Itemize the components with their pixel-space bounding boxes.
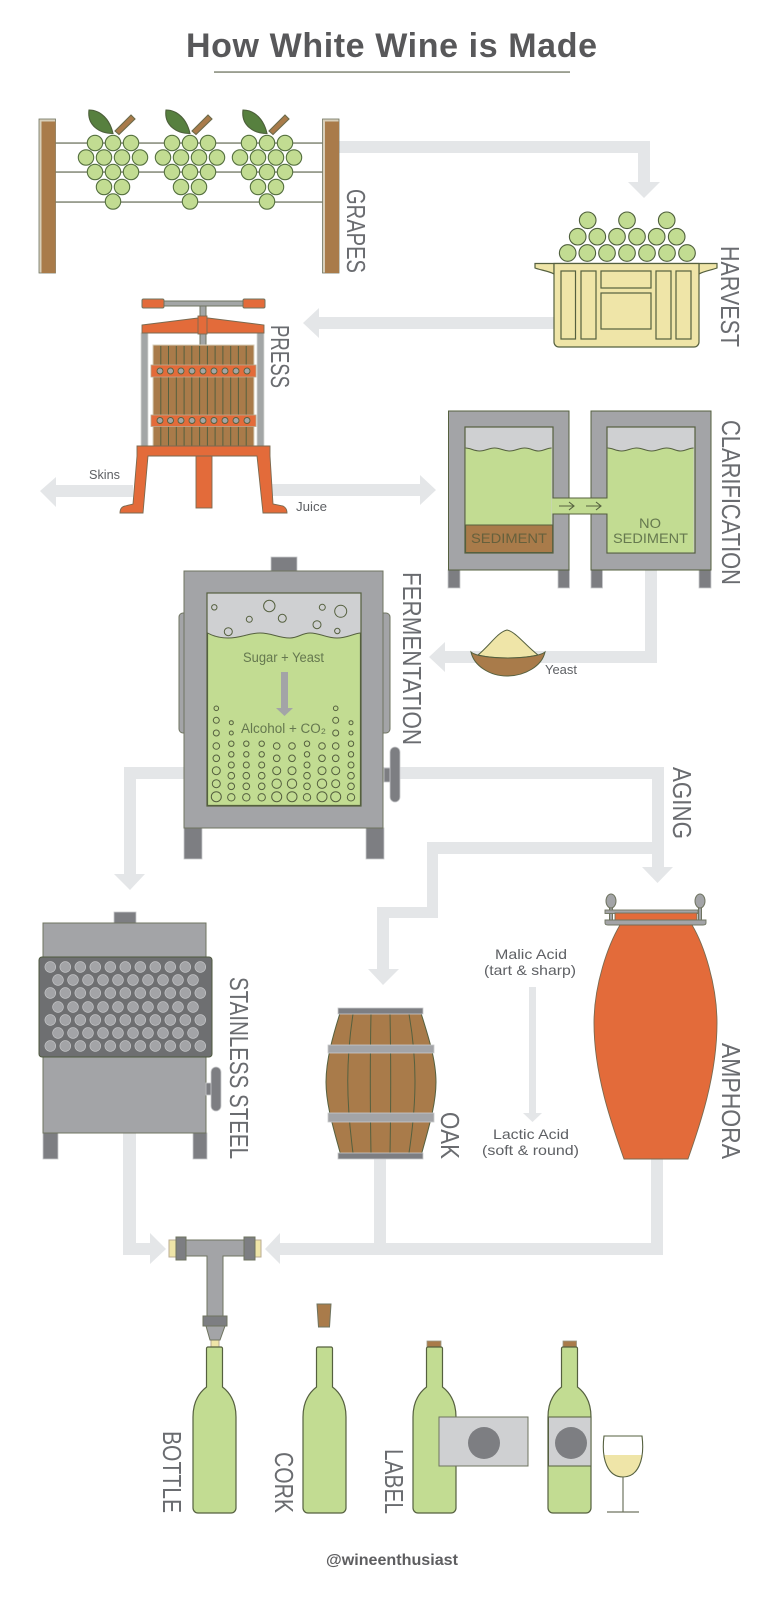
label: press: PRESS <box>265 325 293 388</box>
icon: cork <box>317 1304 331 1327</box>
label: bottle: BOTTLE <box>157 1431 185 1513</box>
panel: grapes <box>39 110 339 273</box>
lid <box>605 910 706 925</box>
foam bubbles <box>212 600 347 636</box>
nozzle <box>206 1326 225 1340</box>
panel: harvest <box>535 212 717 347</box>
post: right <box>322 119 339 273</box>
press screw and handle <box>142 299 265 346</box>
press top beam <box>142 316 264 334</box>
pipe <box>185 1240 245 1316</box>
text: lactic acid: (soft & round) <box>482 1142 579 1158</box>
label: label: LABEL <box>379 1449 407 1514</box>
arrow: fermentation reaction <box>276 672 293 716</box>
clips <box>606 894 705 920</box>
tank body <box>184 571 383 828</box>
panel: oak barrel <box>326 1008 436 1159</box>
arrow: malic to lactic acid <box>523 987 542 1122</box>
label: clarification: CLARIFICATION <box>716 420 744 585</box>
cream ends <box>169 1240 261 1347</box>
panel: fermentation <box>179 557 400 859</box>
icon: grape cluster 1 <box>78 110 148 209</box>
label: grapes: GRAPES <box>341 189 369 273</box>
label: stainless steel: STAINLESS STEEL <box>224 977 252 1159</box>
text: sediment: SEDIMENT <box>471 530 547 546</box>
label: amphora: AMPHORA <box>716 1043 744 1159</box>
wine label flying <box>439 1417 528 1466</box>
tank lid <box>271 557 297 572</box>
arrow: harvest to press <box>303 308 554 338</box>
arrow: fermentation to stainless steel <box>114 767 184 890</box>
tank: with sediment <box>448 411 570 588</box>
icon: yeast bowl <box>471 630 545 676</box>
title: How White Wine is Made <box>186 27 597 65</box>
footer handle: @wineenthusiast <box>326 1552 459 1569</box>
press barrel <box>153 345 254 447</box>
arrow: oak and amphora to bottling <box>265 1159 663 1264</box>
arrow: stainless steel to bottling <box>123 1133 166 1264</box>
tap <box>206 1067 221 1111</box>
text: malic acid: (tart & sharp) <box>484 962 576 978</box>
wine label applied <box>548 1417 591 1466</box>
icon: wine glass <box>603 1436 643 1512</box>
text: sugar + yeast: Sugar + Yeast <box>243 650 324 665</box>
post: left <box>39 119 56 273</box>
arrow: clarification to fermentation <box>429 570 657 672</box>
grapes pile <box>559 212 695 261</box>
text: no sediment: SEDIMENT <box>613 530 688 546</box>
bottle: corking <box>303 1347 346 1513</box>
text: lactic acid: Lactic Acid <box>493 1126 569 1142</box>
press posts <box>141 333 264 446</box>
hoops <box>328 1008 434 1159</box>
bottle: filling <box>193 1347 236 1513</box>
icon: grape cluster 2 <box>155 110 225 209</box>
label: juice: Juice <box>296 499 327 514</box>
label: harvest: HARVEST <box>715 246 743 347</box>
collars <box>176 1237 255 1326</box>
press bands <box>151 365 256 426</box>
label: skins: Skins <box>89 467 120 482</box>
panel: stainless steel tank <box>39 912 221 1159</box>
arrow: skins <box>40 477 133 507</box>
tap <box>384 747 400 802</box>
panel: amphora <box>594 894 717 1159</box>
label: cork: CORK <box>269 1452 297 1513</box>
label: fermentation: FERMENTATION <box>397 572 425 745</box>
bottle: finished <box>548 1341 591 1513</box>
tank legs <box>184 828 384 859</box>
text: alcohol + co2: Alcohol + CO₂ <box>241 721 326 736</box>
arrow: fermentation to amphora and oak <box>368 767 673 985</box>
panel: press <box>120 299 287 513</box>
side handles <box>179 613 390 733</box>
tank interior <box>207 593 361 806</box>
bottle: labeling <box>413 1341 528 1513</box>
amphora body <box>594 925 717 1159</box>
arrow: juice to clarification <box>270 475 436 505</box>
barrel body <box>326 1010 436 1156</box>
cooling jacket <box>39 957 212 1057</box>
text: malic acid: Malic Acid <box>495 946 567 962</box>
label: aging: AGING <box>667 767 695 839</box>
text: no sediment: NO <box>639 515 661 531</box>
arrow: grapes to harvest <box>339 141 660 198</box>
icon: grape cluster 3 <box>232 110 302 209</box>
tank: no sediment <box>591 411 711 588</box>
label: yeast: Yeast <box>545 662 577 677</box>
panel: clarification <box>448 411 711 588</box>
connecting pipe <box>552 498 608 514</box>
legs <box>43 1133 207 1159</box>
label: oak: OAK <box>435 1112 463 1159</box>
press base and legs <box>120 446 287 513</box>
CO2 bubbles <box>211 706 355 802</box>
lid <box>114 912 136 923</box>
harvest bin <box>535 264 717 347</box>
body <box>43 923 206 1133</box>
panel: bottling filler <box>169 1237 261 1347</box>
